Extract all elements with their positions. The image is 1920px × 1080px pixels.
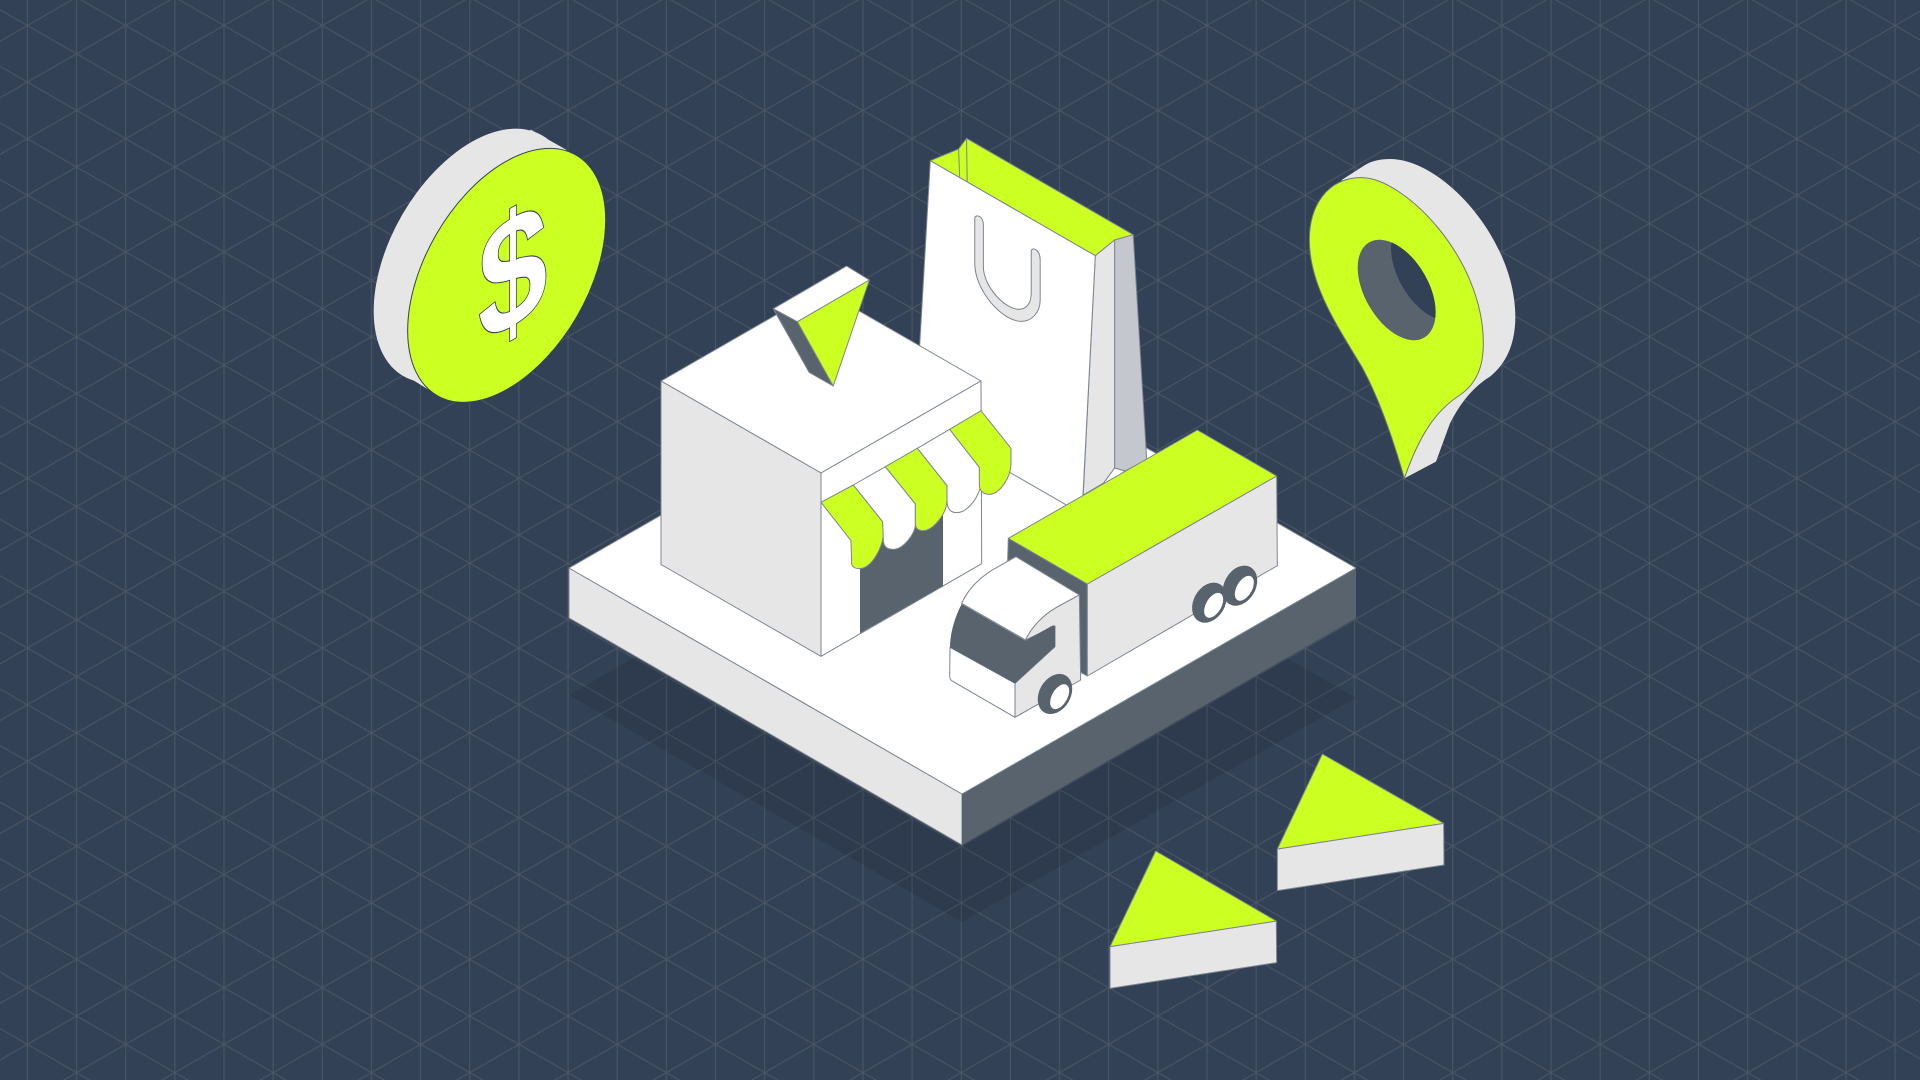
store door bbox=[860, 490, 943, 633]
shopping bag bbox=[916, 138, 1147, 514]
awning stripe 1 bbox=[821, 485, 883, 569]
bag side gusset bbox=[1083, 240, 1115, 495]
sign top bbox=[773, 266, 869, 322]
pin face bbox=[1309, 178, 1483, 478]
bag back gusset bbox=[1115, 235, 1147, 471]
awning stripe 3 bbox=[885, 448, 947, 531]
awning stripe 2 bbox=[853, 467, 915, 549]
platform right side bbox=[962, 568, 1356, 845]
bag inside bbox=[930, 138, 1133, 256]
cab lower front bbox=[950, 647, 1015, 717]
platform top bbox=[569, 342, 1356, 794]
bag base fold bbox=[1090, 468, 1125, 495]
cab side bbox=[1015, 595, 1081, 717]
platform bbox=[569, 342, 1356, 845]
store roof bbox=[661, 289, 981, 473]
platform shadow bbox=[569, 470, 1356, 922]
icon: dollar sign: $ bbox=[478, 160, 548, 383]
rear wheel 1 bbox=[1216, 559, 1264, 612]
triangle 2 bbox=[1277, 754, 1444, 891]
storefront bbox=[661, 289, 1011, 656]
triangle 1 bbox=[1110, 851, 1277, 988]
icon: location pin bbox=[1309, 159, 1515, 478]
roof triangle sign bbox=[773, 266, 869, 386]
store left wall bbox=[661, 381, 821, 656]
cargo box side bbox=[1087, 476, 1277, 676]
delivery truck bbox=[950, 430, 1277, 720]
coin edge bbox=[333, 95, 613, 417]
pin hole bbox=[1358, 240, 1436, 340]
store front wall bbox=[821, 381, 982, 656]
bag front bbox=[916, 161, 1095, 514]
awning bbox=[821, 411, 1011, 569]
windshield bbox=[950, 604, 1055, 683]
bag handle bbox=[975, 216, 1040, 321]
cargo box rear dark side bbox=[1008, 538, 1087, 676]
cargo box top bbox=[1008, 430, 1277, 584]
cab roof bbox=[962, 557, 1079, 640]
sign dark side bbox=[773, 309, 833, 386]
rear wheel 2 bbox=[1185, 576, 1234, 629]
coin face bbox=[367, 114, 647, 436]
floating triangles bbox=[1110, 754, 1444, 988]
bag inner fold lines bbox=[959, 138, 967, 182]
sign green face bbox=[797, 280, 869, 386]
platform left side bbox=[569, 568, 962, 845]
front wheel bbox=[1031, 668, 1079, 720]
pin edge bbox=[1342, 159, 1515, 478]
awning stripe 4 bbox=[917, 429, 980, 513]
awning stripe 5 bbox=[950, 411, 1011, 494]
icon: dollar coin bbox=[333, 95, 647, 436]
